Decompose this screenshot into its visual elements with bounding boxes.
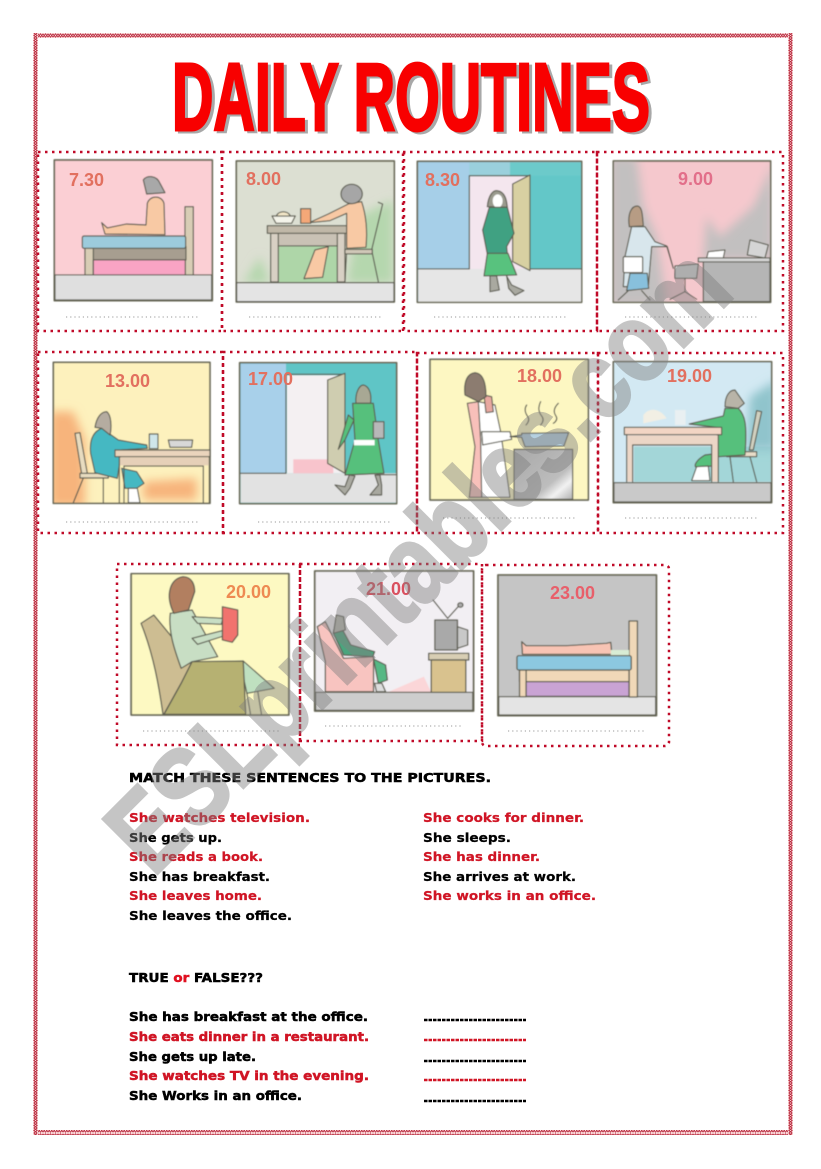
text block: sentences left column: She watches television. bbox=[129, 810, 310, 825]
picture: walking to a door bbox=[240, 363, 397, 504]
picture: at breakfast table bbox=[236, 161, 394, 302]
panel: 8.00 breakfast bbox=[222, 152, 404, 331]
dotted box bbox=[223, 352, 417, 533]
text block: true or false statements: She eats dinner in a restaurant. bbox=[129, 1029, 369, 1044]
panel: 23.00 sleeps bbox=[482, 565, 669, 746]
answer line bbox=[143, 730, 280, 732]
panel: 9.00 arrives at work bbox=[597, 152, 783, 331]
panel: 8.30 leaves home bbox=[403, 152, 597, 331]
dotted box bbox=[417, 353, 598, 533]
text block: sentences left column: She leaves the office. bbox=[129, 908, 292, 923]
heading: match sentences: MATCH THESE SENTENCES TO THE PICTURES. bbox=[129, 770, 491, 785]
dotted box bbox=[598, 353, 783, 533]
time: 9.00 bbox=[678, 169, 713, 189]
answer line bbox=[434, 316, 567, 318]
time: 8.30 bbox=[425, 170, 460, 190]
text block: sentences right column: She cooks for dinner. bbox=[423, 810, 584, 825]
time: 23.00 bbox=[550, 583, 595, 603]
text block: sentences left column: She leaves home. bbox=[129, 888, 262, 903]
heading: true or false: TRUE or FALSE??? bbox=[129, 970, 263, 985]
answer line bbox=[625, 517, 758, 519]
time: 17.00 bbox=[248, 369, 293, 389]
dotted box bbox=[597, 152, 783, 331]
picture: working at a desk bbox=[50, 362, 210, 507]
answer line bbox=[66, 316, 200, 318]
text block: sentences left column: She gets up. bbox=[129, 830, 222, 845]
panel: 20.00 reads a book bbox=[117, 564, 300, 745]
dotted box bbox=[222, 152, 404, 331]
dotted box bbox=[300, 564, 482, 741]
picture: eating at a table bbox=[613, 362, 777, 503]
dotted box bbox=[117, 564, 300, 745]
text block: sentences left column: She reads a book. bbox=[129, 849, 263, 864]
dotted box bbox=[38, 352, 223, 533]
picture: leaving through a door bbox=[417, 161, 582, 302]
time: 7.30 bbox=[69, 170, 104, 190]
answer line bbox=[443, 517, 576, 519]
text block: sentences right column bbox=[423, 810, 596, 903]
time: 19.00 bbox=[667, 366, 712, 386]
time: 18.00 bbox=[517, 366, 562, 386]
answer lines: true or false bbox=[424, 1020, 526, 1101]
picture: sleeping in bed bbox=[498, 575, 656, 716]
panel: 18.00 cooks for dinner bbox=[417, 353, 598, 533]
time: 8.00 bbox=[246, 169, 281, 189]
text block: sentences right column: She sleeps. bbox=[423, 830, 511, 845]
answer line bbox=[325, 725, 462, 727]
text block: true or false statements: She watches TV in the evening. bbox=[129, 1068, 369, 1083]
picture: cooking at a stove bbox=[430, 359, 588, 500]
text block: sentences right column: She has dinner. bbox=[423, 849, 540, 864]
text block: true or false statements: She gets up late. bbox=[129, 1049, 256, 1064]
answer line bbox=[66, 521, 199, 523]
picture: reading in an armchair bbox=[131, 574, 289, 715]
panel: 13.00 works in an office bbox=[38, 352, 223, 533]
panel: 17.00 leaves the office bbox=[223, 352, 417, 533]
answer line bbox=[508, 730, 645, 732]
dotted box bbox=[482, 565, 669, 746]
text block: true or false statements bbox=[129, 1009, 369, 1103]
time: 21.00 bbox=[366, 579, 411, 599]
answer line bbox=[625, 316, 758, 318]
picture: watching TV in an armchair bbox=[315, 571, 474, 711]
panel: 19.00 has dinner bbox=[598, 353, 783, 533]
text block: sentences left column bbox=[129, 810, 310, 923]
panel: 21.00 watches television bbox=[300, 564, 482, 741]
time: 13.00 bbox=[105, 371, 150, 391]
picture: arriving at office desk bbox=[610, 157, 773, 307]
text block: sentences right column: She arrives at work. bbox=[423, 869, 576, 884]
time: 20.00 bbox=[226, 582, 271, 602]
picture: sitting up in bed bbox=[54, 160, 212, 301]
dotted box bbox=[403, 152, 597, 331]
dotted box bbox=[38, 152, 222, 331]
answer line bbox=[249, 316, 383, 318]
text block: true or false statements: She Works in an office. bbox=[129, 1088, 302, 1103]
answer line bbox=[258, 521, 392, 523]
text block: sentences left column: She has breakfast. bbox=[129, 869, 270, 884]
text block: true or false statements: She has breakfast at the office. bbox=[129, 1009, 368, 1024]
panel: 7.30 gets up bbox=[38, 152, 222, 331]
text block: sentences right column: She works in an office. bbox=[423, 888, 596, 903]
